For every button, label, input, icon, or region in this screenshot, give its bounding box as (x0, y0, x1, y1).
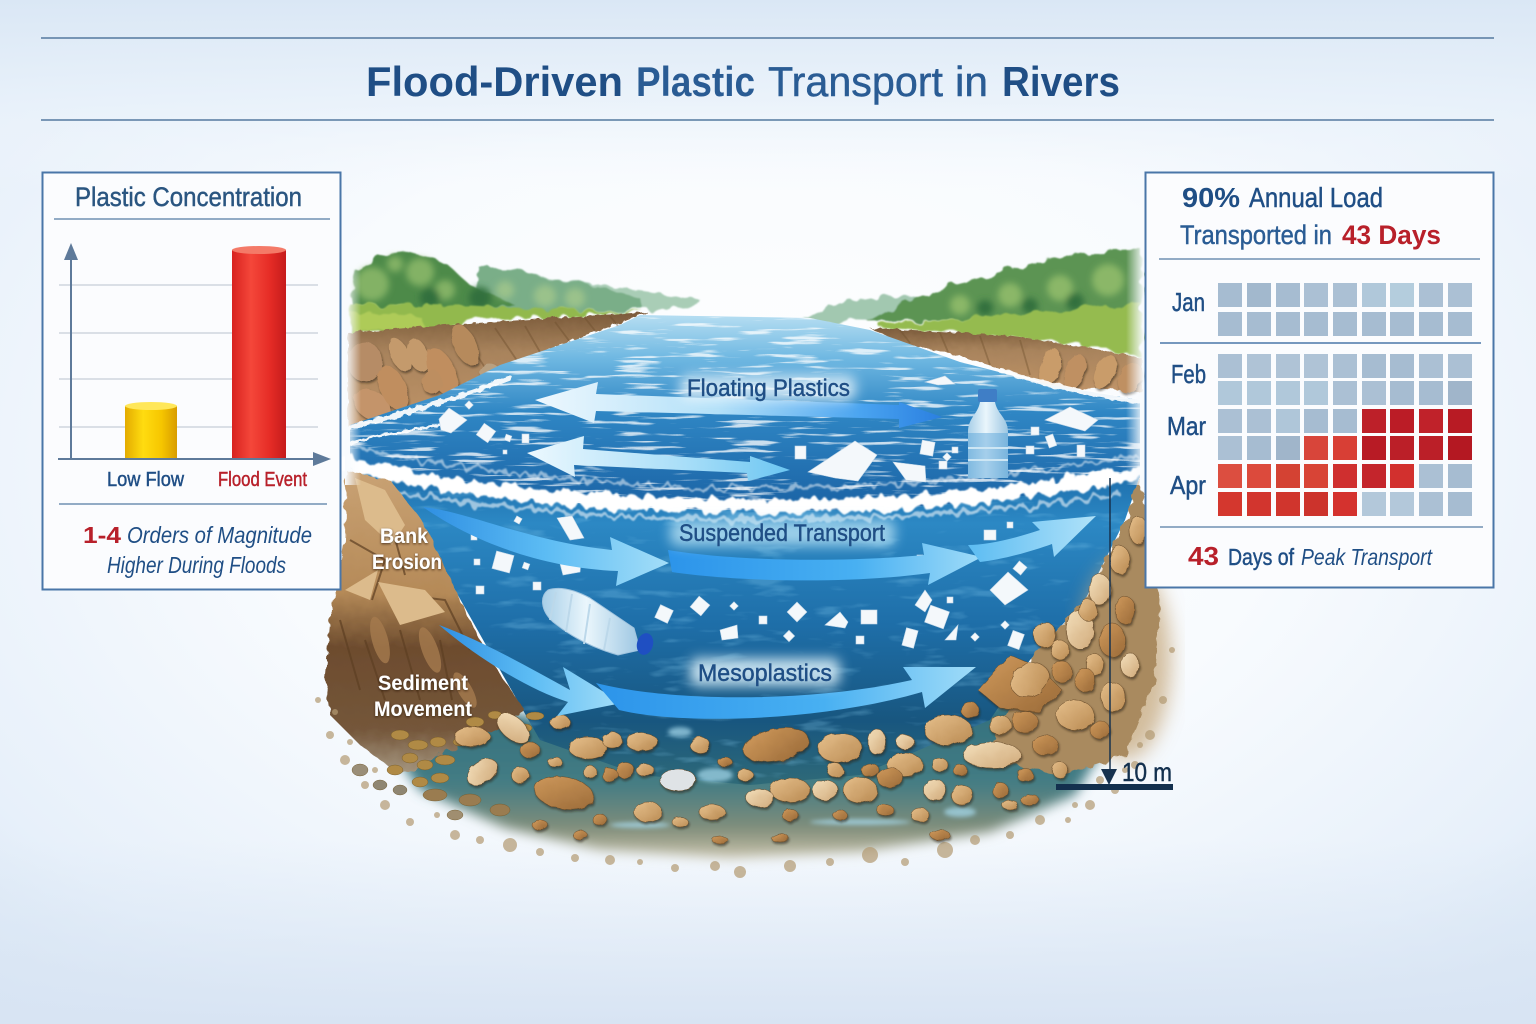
label: sediment movement: Movement (374, 698, 472, 721)
label: bank erosion (372, 525, 442, 574)
month labels: Apr (1170, 470, 1206, 500)
callout: orders of magnitude (83, 522, 312, 578)
month labels (1167, 287, 1206, 500)
arrow: suspended transport left (423, 507, 669, 586)
panel heading: 43 Days (1342, 220, 1441, 250)
arrow: floating plastics upper (535, 382, 942, 428)
depth scale: 10 m: 10 m (1122, 757, 1172, 787)
arrow: mesoplastics left (439, 625, 622, 716)
sediment speckles (315, 647, 1175, 878)
month labels: Jan (1172, 287, 1205, 317)
eroded rock blocks (348, 320, 500, 427)
arrow: floating plastics lower (527, 436, 790, 481)
bar: low flow (125, 402, 177, 458)
panel heading (1180, 182, 1441, 250)
upper eroded bank: left (348, 312, 648, 427)
icon: upright water bottle (968, 389, 1008, 478)
panel heading: Plastic Concentration (75, 182, 302, 212)
depth scale: 10 m (1056, 478, 1173, 790)
surface plastic fragments (439, 376, 1098, 482)
title: Flood-Driven (366, 58, 623, 105)
arrow: mesoplastics right (596, 667, 976, 719)
label: mesoplastics: Mesoplastics (698, 660, 832, 687)
glints on the river bed (610, 727, 976, 828)
trees: right bank (805, 250, 1142, 322)
callout: peak transport: Days of (1228, 544, 1295, 570)
right bank (985, 478, 1160, 775)
label: sediment movement (374, 672, 472, 721)
icon: tilted plastic bottle (543, 588, 656, 657)
river surface (340, 310, 1150, 520)
callout: peak transport: Peak Transport (1301, 544, 1433, 570)
upper eroded bank: right (870, 328, 1147, 397)
arrow: suspended transport middle (668, 543, 982, 585)
arrow: suspended transport right (968, 516, 1096, 562)
panel heading: 90% (1182, 182, 1240, 213)
panel heading: Transported in (1180, 220, 1332, 250)
underwater cross-section (340, 466, 1150, 790)
month labels: Feb (1171, 359, 1206, 389)
panel: annual load calendar (1146, 172, 1494, 588)
edge fade (345, 245, 1144, 485)
callout: orders of magnitude: 1-4 (83, 522, 121, 548)
label: sediment movement: Sediment (378, 672, 468, 695)
golden gravel field (352, 711, 544, 820)
rocks on the river bed (454, 516, 1147, 844)
trees: left bank (352, 252, 700, 312)
callout: orders of magnitude: Higher During Floods (107, 552, 286, 578)
panel heading: Annual Load (1249, 182, 1383, 213)
callout: peak transport: 43 (1188, 541, 1219, 571)
title (41, 38, 1494, 120)
left bank: bank erosion (325, 470, 525, 775)
title: in (955, 58, 988, 105)
river illustration (315, 245, 1175, 878)
bar labels: Flood Event (218, 469, 307, 491)
label: bank erosion: Erosion (372, 551, 442, 574)
riverbed base (385, 690, 1120, 858)
bar labels: Low Flow (107, 469, 184, 491)
month labels: Mar (1167, 411, 1206, 441)
label: bank erosion: Bank (380, 525, 428, 548)
grass: left and right banks (350, 303, 1142, 358)
callout: peak transport (1188, 541, 1433, 571)
foam line at the water surface (346, 446, 1140, 520)
soft sediment halo (1079, 560, 1171, 760)
label: suspended transport: Suspended Transport (679, 520, 885, 547)
day grid (1218, 283, 1472, 516)
bar labels (107, 469, 307, 491)
title: Rivers (1002, 58, 1120, 105)
callout: orders of magnitude: Orders of Magnitude (127, 522, 312, 548)
bar chart (58, 243, 331, 466)
panel: plastic concentration (42, 172, 340, 590)
title: Transport (768, 58, 943, 105)
title: Plastic (636, 58, 755, 105)
bar: flood event (232, 246, 286, 458)
label: floating plastics: Floating Plastics (687, 375, 850, 402)
underwater plastic fragments (471, 516, 1028, 650)
